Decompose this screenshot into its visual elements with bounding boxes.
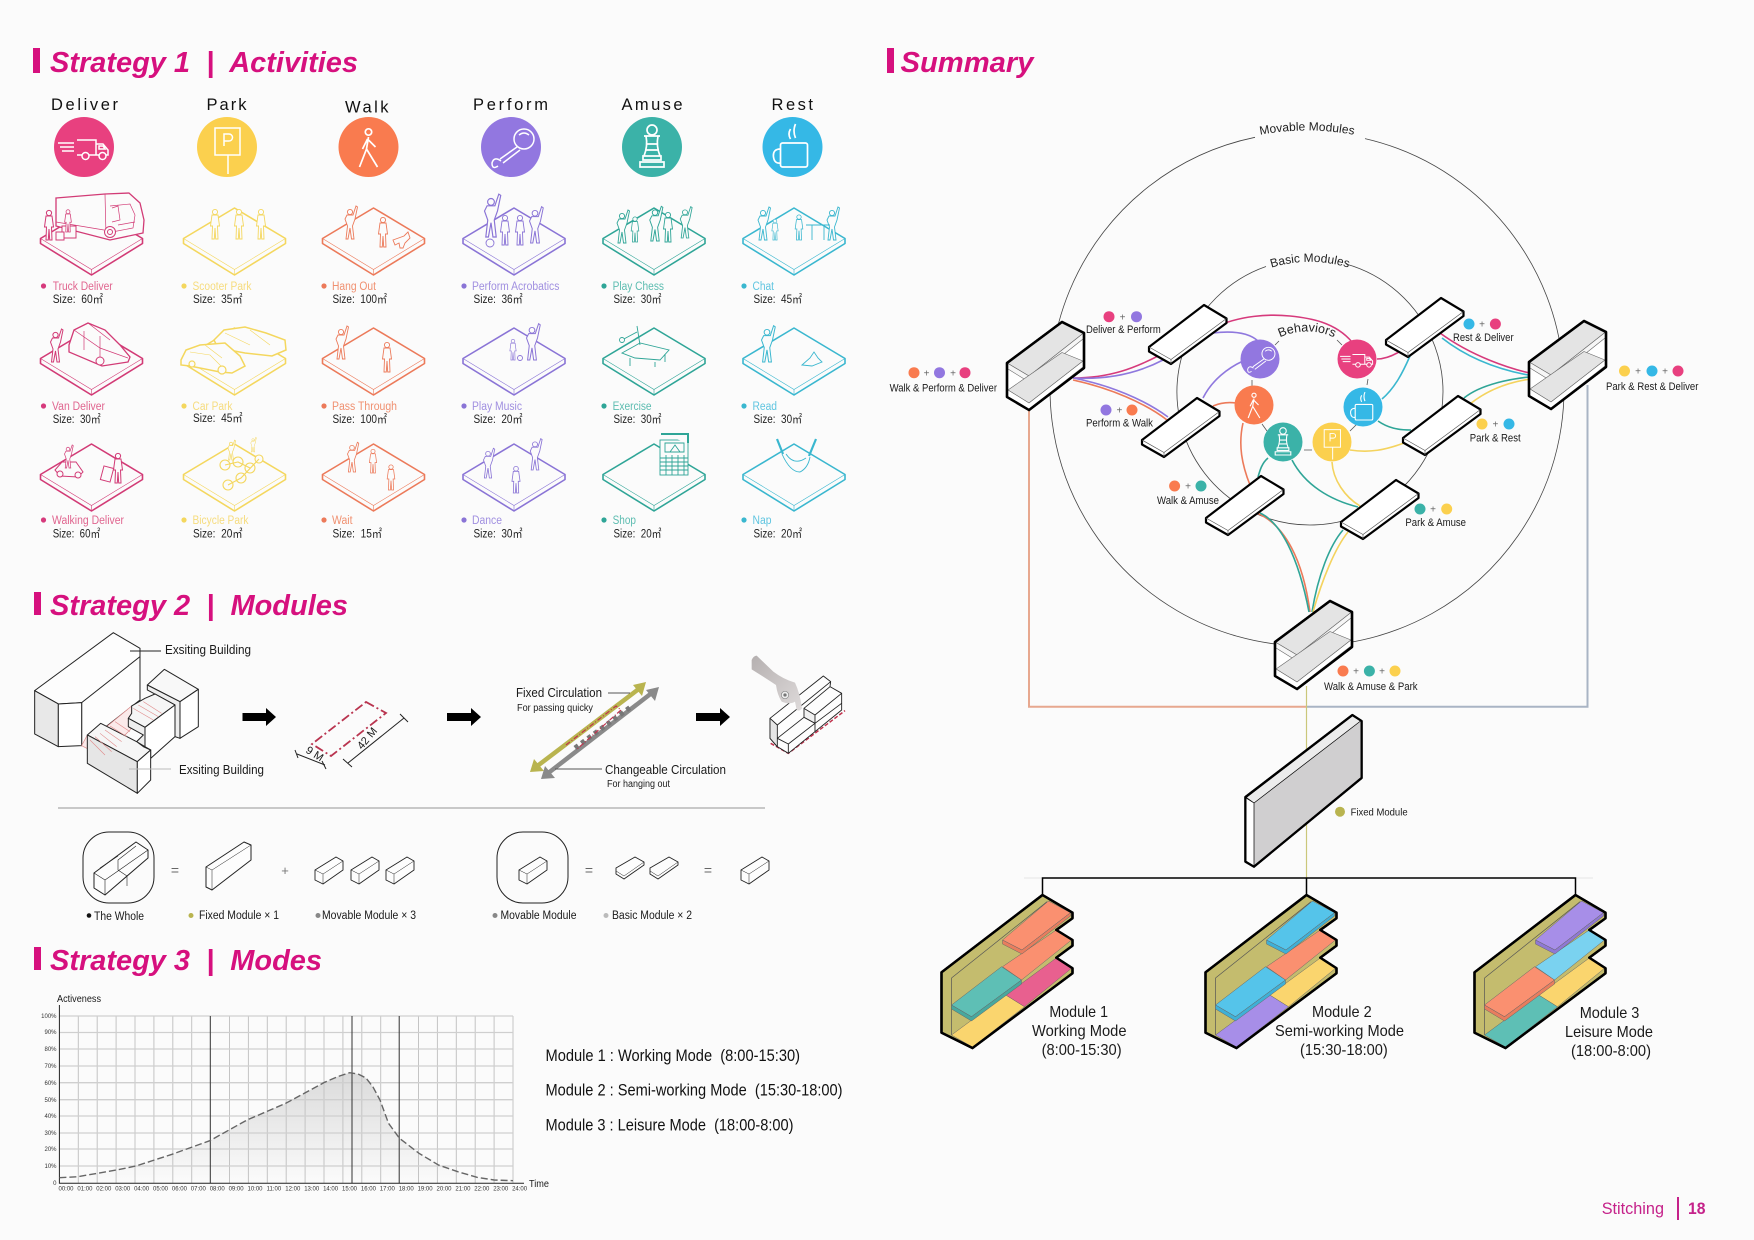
y axis labels: 10% xyxy=(44,1164,57,1170)
x axis labels: 09:00 xyxy=(229,1186,244,1192)
label: walk perform deliver: Walk & Perform & Deliver xyxy=(890,382,997,394)
x axis labels: 01:00 xyxy=(77,1186,93,1192)
site dimensions drawing: 9 M xyxy=(303,744,325,764)
panel: strategy 1 activities xyxy=(33,47,845,540)
behavior icon: amuse xyxy=(1264,422,1302,462)
activity labels xyxy=(41,281,802,540)
panel: strategy 3 modes xyxy=(34,945,842,1192)
module legend: Movable Module × 3 xyxy=(322,910,416,922)
x axis labels: 24:00 xyxy=(512,1186,528,1192)
label: existing building top: Exsiting Building xyxy=(165,643,251,657)
label: walk amuse park xyxy=(1324,666,1418,693)
equation: movable module: = xyxy=(585,862,593,878)
x axis labels xyxy=(58,1186,528,1192)
column: amuse activities xyxy=(603,206,705,511)
label: deliver perform: Deliver & Perform xyxy=(1086,324,1161,336)
x axis labels: 12:00 xyxy=(285,1186,301,1192)
y axis labels xyxy=(41,1014,57,1187)
row 1 labels: Size: 60㎡ xyxy=(53,293,103,306)
whole module xyxy=(94,842,148,895)
play music tile xyxy=(463,324,565,395)
row 3 labels: Size: 15㎡ xyxy=(332,528,382,540)
x axis labels: 19:00 xyxy=(418,1186,433,1192)
x axis labels: 21:00 xyxy=(455,1186,471,1192)
movable module: left xyxy=(1007,322,1084,410)
row 2 labels: Size: 100㎡ xyxy=(332,413,387,426)
label: existing building bottom: Exsiting Building xyxy=(179,763,264,777)
behavior icon: walk xyxy=(1234,386,1274,424)
panel: summary xyxy=(887,47,1699,1060)
distribution tree xyxy=(1024,878,1593,895)
behavior icon: park xyxy=(1312,422,1352,462)
read tile xyxy=(743,326,845,395)
ring: movable modules xyxy=(1050,122,1564,644)
label: module 2 xyxy=(1275,1004,1404,1059)
exercise tile xyxy=(603,326,705,395)
label: rest deliver: Rest & Deliver xyxy=(1453,332,1514,344)
ring: basic modules xyxy=(1176,254,1444,526)
label: module 1: Working Mode xyxy=(1032,1023,1127,1040)
label: park rest deliver xyxy=(1606,366,1699,393)
equation: the whole: + xyxy=(281,863,289,878)
mode schedule text: Module 3 : Leisure Mode (18:00-8:00) xyxy=(546,1116,794,1134)
row 2 labels: Play Music xyxy=(472,401,522,413)
row 3 labels: Size: 20㎡ xyxy=(754,528,802,540)
equation: movable module: = xyxy=(704,862,712,878)
label: changeable circulation: For hanging out xyxy=(607,779,670,790)
hand placing modules xyxy=(752,656,845,753)
behavior icon: deliver xyxy=(1338,340,1376,378)
footer: page marker: Stitching xyxy=(1602,1200,1664,1218)
column titles: Amuse xyxy=(622,96,682,114)
movable module: right xyxy=(1529,321,1606,409)
movable module icon xyxy=(519,857,547,884)
row 3 labels: Size: 30㎡ xyxy=(474,528,523,540)
module legend: Fixed Module × 1 xyxy=(199,910,279,922)
x axis labels: 15:00 xyxy=(342,1186,358,1192)
footer: page marker: 18 xyxy=(1688,1200,1706,1218)
ring: behaviors: Behaviors xyxy=(1278,323,1336,337)
wait tile xyxy=(322,442,424,511)
activeness chart: Activeness xyxy=(57,994,101,1005)
equation: the whole xyxy=(83,832,414,903)
arrow 1 xyxy=(242,708,276,726)
label: module 2: Module 2 xyxy=(1312,1004,1372,1021)
x axis labels: 02:00 xyxy=(96,1186,112,1192)
label: park amuse: Park & Amuse xyxy=(1405,517,1466,529)
label: rest deliver xyxy=(1453,318,1514,344)
label: fixed circulation xyxy=(516,686,630,714)
module legend: Movable Module xyxy=(500,910,576,922)
label: park rest deliver: + xyxy=(1662,366,1668,378)
label: fixed circulation: Fixed Circulation xyxy=(516,686,602,700)
x axis labels: 16:00 xyxy=(361,1186,377,1192)
label: existing building bottom xyxy=(129,763,264,777)
icon: deliver xyxy=(54,117,114,177)
basic module: park and rest xyxy=(1403,396,1480,455)
label: walk perform deliver xyxy=(890,367,997,394)
label: module 2: (15:30-18:00) xyxy=(1300,1042,1388,1059)
row 1 labels: Size: 30㎡ xyxy=(614,293,662,306)
x axis labels: 10:00 xyxy=(247,1186,263,1192)
mode module 2 xyxy=(1206,895,1336,1048)
label: walk amuse park: + xyxy=(1353,666,1359,678)
row 1 labels: Perform Acrobatics xyxy=(472,281,560,293)
heading: strategy 1: Strategy 1 | Activities xyxy=(50,47,358,79)
row 2 labels xyxy=(41,401,802,426)
panel: strategy 2 modules xyxy=(34,590,845,923)
mode schedule text: Module 2 : Semi-working Mode (15:30-18:00) xyxy=(546,1082,842,1100)
label: fixed circulation: For passing quicky xyxy=(517,703,593,714)
x axis labels: 00:00 xyxy=(58,1186,74,1192)
rounded frame: movable module xyxy=(497,832,568,903)
behavior icon: perform xyxy=(1240,340,1280,378)
icon: park xyxy=(197,117,257,177)
rounded frame: the whole xyxy=(83,832,154,903)
row 1 labels: Size: 36㎡ xyxy=(474,293,523,306)
van deliver tile xyxy=(40,323,142,395)
chat tile xyxy=(743,207,845,275)
fixed module xyxy=(206,842,251,890)
row 2 labels: Size: 20㎡ xyxy=(474,413,523,426)
row 1 labels: Size: 45㎡ xyxy=(754,293,802,306)
column titles xyxy=(51,96,813,116)
behavior icon: rest xyxy=(1344,388,1382,426)
mode schedule text xyxy=(546,1047,842,1134)
y axis labels: 40% xyxy=(44,1114,57,1120)
label: walk amuse xyxy=(1157,480,1219,507)
label: rest deliver: + xyxy=(1479,320,1485,330)
row 1 labels: Chat xyxy=(752,281,775,293)
fixed module xyxy=(1245,715,1362,867)
basic module: walk and amuse xyxy=(1206,476,1284,535)
label: module 3: (18:00-8:00) xyxy=(1571,1043,1651,1060)
row 1 labels: Play Chess xyxy=(613,281,664,293)
basic modules x2 xyxy=(616,857,678,879)
y axis labels: 70% xyxy=(44,1064,57,1070)
row 3 labels: Wait xyxy=(332,515,353,527)
mode module 1 xyxy=(942,895,1072,1048)
ring: behaviors xyxy=(1252,323,1368,450)
column titles: Walk xyxy=(345,98,389,116)
label: module 1: Module 1 xyxy=(1049,1004,1108,1021)
truck deliver tile xyxy=(40,193,144,275)
basic module: perform and walk xyxy=(1142,398,1220,457)
y axis labels: 100% xyxy=(41,1014,57,1020)
row 3 labels: Walking Deliver xyxy=(52,515,124,527)
label: fixed module: Fixed Module xyxy=(1351,806,1408,818)
row 1 labels: Size: 100㎡ xyxy=(332,293,387,306)
module legend: The Whole xyxy=(94,911,144,923)
walking deliver tile xyxy=(40,444,142,511)
y axis labels: 20% xyxy=(44,1147,57,1153)
mode module 3 xyxy=(1474,895,1606,1048)
arrow 3 xyxy=(696,708,730,726)
x axis labels: 11:00 xyxy=(267,1186,282,1192)
row 1 labels: Truck Deliver xyxy=(53,281,113,293)
column: perform activities xyxy=(463,194,565,511)
x axis labels: 08:00 xyxy=(210,1186,225,1192)
y axis labels: 0 xyxy=(53,1181,57,1187)
scooter park tile xyxy=(184,208,286,275)
hang out tile xyxy=(322,206,424,275)
x axis labels: 05:00 xyxy=(153,1186,169,1192)
basic module: deliver and perform xyxy=(1149,305,1226,364)
y axis labels: 90% xyxy=(44,1030,57,1036)
row 3 labels: Size: 60㎡ xyxy=(53,528,101,540)
dance tile xyxy=(463,439,565,511)
x axis labels: 14:00 xyxy=(323,1186,339,1192)
y axis labels: 80% xyxy=(44,1047,57,1053)
ring: basic modules: Basic Modules xyxy=(1270,254,1350,268)
label: park rest xyxy=(1470,418,1521,444)
row 1 labels: Hang Out xyxy=(332,281,377,293)
row 1 labels xyxy=(41,281,802,306)
movable modules x3 xyxy=(315,857,414,884)
label: module 2: Semi-working Mode xyxy=(1275,1023,1404,1040)
car park tile xyxy=(181,327,286,395)
label: module 3: Leisure Mode xyxy=(1565,1024,1653,1041)
row 3 labels: Shop xyxy=(613,515,636,527)
row 3 labels: Size: 20㎡ xyxy=(614,528,662,540)
label: park rest deliver: + xyxy=(1635,366,1641,378)
pass through tile xyxy=(322,326,424,395)
row 1 labels: Scooter Park xyxy=(192,281,252,293)
x axis labels: 06:00 xyxy=(172,1186,188,1192)
x axis labels: 04:00 xyxy=(134,1186,150,1192)
row 2 labels: Pass Through xyxy=(332,401,397,413)
label: walk amuse park: Walk & Amuse & Park xyxy=(1324,681,1418,693)
connections: behaviors to modules xyxy=(1073,315,1540,612)
mode schedule text: Module 1 : Working Mode (8:00-15:30) xyxy=(546,1047,800,1065)
ring: movable modules: Movable Modules xyxy=(1260,122,1354,135)
label: module 1 xyxy=(1032,1004,1127,1059)
label: module 3: Module 3 xyxy=(1580,1005,1639,1022)
heading: strategy 3: Strategy 3 | Modes xyxy=(50,945,322,977)
assembled movable module xyxy=(741,857,769,884)
column: park activities xyxy=(181,208,286,511)
label: park rest deliver: Park & Rest & Deliver xyxy=(1606,381,1699,393)
label: perform walk: + xyxy=(1116,406,1122,416)
label: existing building top xyxy=(130,643,251,657)
row 3 labels: Dance xyxy=(472,515,502,527)
frame lines to fixed module xyxy=(1029,385,1588,707)
x axis labels: 18:00 xyxy=(399,1186,414,1192)
equation: the whole: = xyxy=(171,862,179,878)
row 2 labels: Exercise xyxy=(613,401,652,413)
y axis labels: 30% xyxy=(44,1131,57,1137)
label: perform walk xyxy=(1086,404,1153,430)
module legend: Basic Module × 2 xyxy=(612,910,692,922)
play chess tile xyxy=(603,206,705,275)
activeness chart xyxy=(41,994,549,1192)
circulation diagram xyxy=(530,682,659,779)
y axis labels: 50% xyxy=(44,1098,57,1104)
label: park rest: Park & Rest xyxy=(1470,432,1521,444)
x axis labels: 03:00 xyxy=(115,1186,131,1192)
row 2 labels: Van Deliver xyxy=(52,401,105,413)
label: deliver perform xyxy=(1086,311,1161,336)
label: walk amuse: Walk & Amuse xyxy=(1157,495,1219,507)
row 2 labels: Read xyxy=(752,401,777,413)
activeness curve xyxy=(59,1073,513,1181)
column titles: Perform xyxy=(473,96,548,114)
site dimensions drawing: 42 M xyxy=(355,725,380,752)
x axis labels: 17:00 xyxy=(380,1186,395,1192)
column titles: Rest xyxy=(772,96,813,114)
column: rest activities xyxy=(743,207,845,511)
label: park amuse: + xyxy=(1430,504,1436,516)
perform acrobatics tile xyxy=(463,194,565,275)
row 2 labels: Size: 30㎡ xyxy=(53,413,101,426)
equation: movable module xyxy=(497,832,769,903)
column titles: Deliver xyxy=(51,96,118,114)
label: walk perform deliver: + xyxy=(924,368,930,380)
x axis labels: 07:00 xyxy=(191,1186,206,1192)
label: park amuse xyxy=(1405,504,1466,529)
row 3 labels xyxy=(41,515,802,540)
row 1 labels: Size: 35㎡ xyxy=(193,293,243,306)
x axis labels: 20:00 xyxy=(436,1186,452,1192)
heading: summary: Summary xyxy=(900,47,1035,79)
row 2 labels: Size: 30㎡ xyxy=(614,413,662,426)
nap tile xyxy=(743,439,845,511)
row 3 labels: Nap xyxy=(752,515,772,527)
column: walk activities xyxy=(322,206,424,511)
row 2 labels: Size: 30㎡ xyxy=(754,413,802,426)
x axis labels: 13:00 xyxy=(304,1186,320,1192)
site dimensions drawing xyxy=(295,702,408,769)
label: park rest: + xyxy=(1492,420,1498,430)
label: deliver perform: + xyxy=(1120,312,1126,324)
arrow 2 xyxy=(447,708,481,726)
heading: strategy 2: Strategy 2 | Modules xyxy=(50,590,348,622)
x axis labels: 23:00 xyxy=(493,1186,509,1192)
existing buildings site drawing xyxy=(35,633,198,793)
row 2 labels: Car Park xyxy=(192,401,233,413)
label: walk perform deliver: + xyxy=(950,368,956,380)
bicycle park tile xyxy=(184,437,286,511)
row 2 labels: Size: 45㎡ xyxy=(193,412,243,425)
icon: amuse xyxy=(622,117,682,177)
label: walk amuse: + xyxy=(1185,482,1191,492)
label: changeable circulation xyxy=(555,763,726,790)
y axis labels: 60% xyxy=(44,1081,57,1087)
connector: fixed axis xyxy=(1306,686,1308,878)
module legend xyxy=(87,910,692,923)
activeness chart: Time xyxy=(529,1179,549,1190)
movable module: bottom xyxy=(1275,601,1352,689)
label: changeable circulation: Changeable Circulation xyxy=(605,763,726,777)
row 3 labels: Size: 20㎡ xyxy=(193,528,243,540)
shop tile xyxy=(603,434,705,511)
icon: walk xyxy=(338,117,398,177)
icon: rest xyxy=(762,117,822,177)
footer: page marker xyxy=(1602,1197,1706,1220)
column: deliver activities xyxy=(40,193,144,511)
x axis labels: 22:00 xyxy=(474,1186,490,1192)
label: walk amuse park: + xyxy=(1379,666,1385,678)
row 3 labels: Bicycle Park xyxy=(192,515,249,527)
column titles: Park xyxy=(206,96,247,114)
label: module 3 xyxy=(1565,1005,1653,1060)
basic module: rest and deliver xyxy=(1386,298,1464,357)
basic module: park and amuse xyxy=(1341,480,1418,539)
label: module 1: (8:00-15:30) xyxy=(1042,1042,1122,1059)
label: perform walk: Perform & Walk xyxy=(1086,418,1153,430)
icon: perform xyxy=(481,117,541,177)
